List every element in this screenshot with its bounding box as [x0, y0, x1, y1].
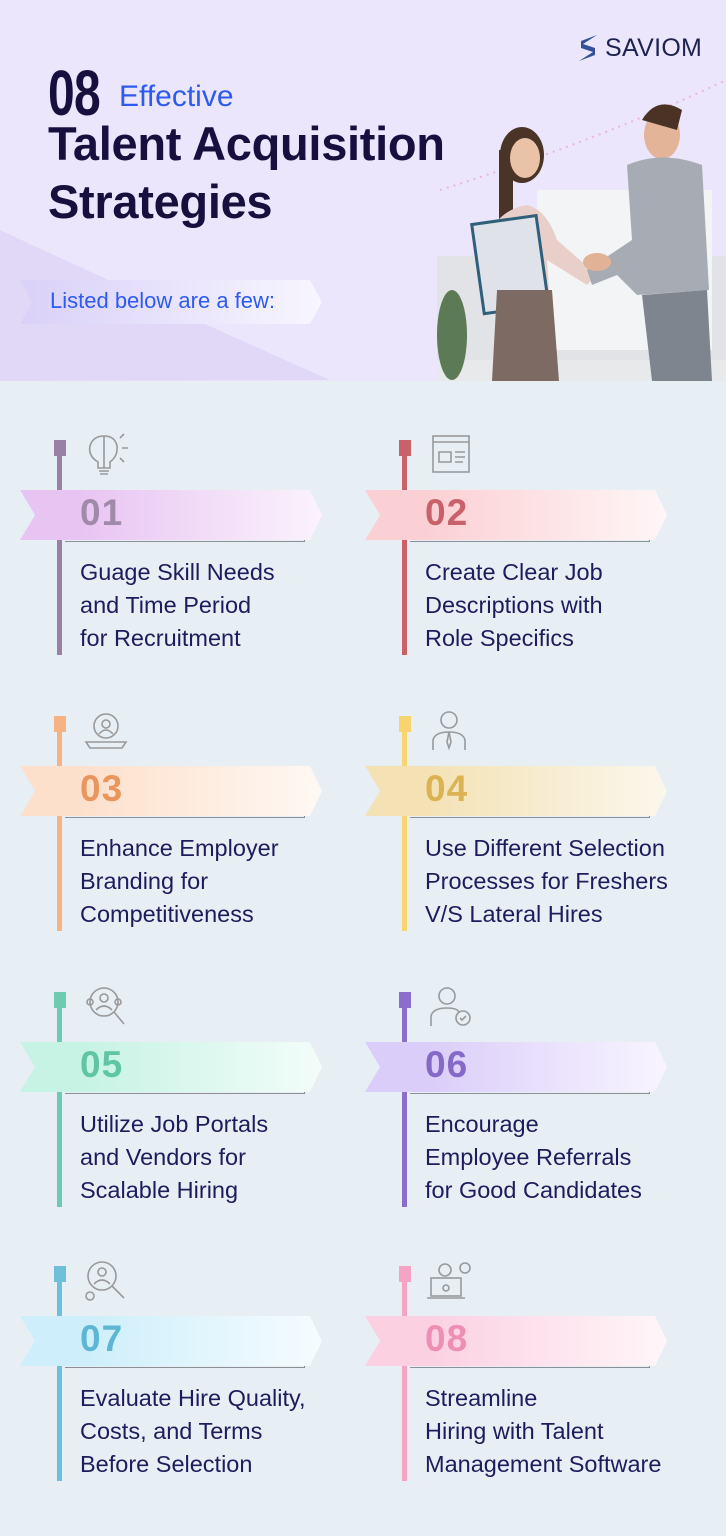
item 05 — [20, 987, 322, 1207]
text 05: Scalable Hiring — [80, 1177, 238, 1203]
number 01: 01 — [80, 492, 123, 533]
icon: laptop with gear — [427, 1262, 471, 1299]
text 05: Utilize Job Portals — [80, 1111, 268, 1137]
title: Effective — [119, 80, 234, 113]
item 02 — [365, 435, 667, 655]
item 03 — [20, 713, 322, 931]
item 07 — [20, 1261, 322, 1481]
text 08 — [425, 1385, 661, 1477]
text 07: Before Selection — [80, 1451, 252, 1477]
text 07 — [80, 1385, 306, 1477]
icon: magnifier person — [85, 1261, 124, 1301]
item 04 — [365, 711, 668, 931]
text 08: Management Software — [425, 1451, 661, 1477]
text 02: Descriptions with — [425, 592, 603, 618]
text 01: for Recruitment — [80, 625, 241, 651]
text 03 — [80, 835, 279, 927]
text 03: Branding for — [80, 868, 208, 894]
text 08: Streamline — [425, 1385, 537, 1411]
logo: SAVIOM: SAVIOM — [605, 34, 702, 62]
icon: person with check — [430, 987, 471, 1026]
number 06: 06 — [425, 1044, 468, 1085]
subtitle ribbon — [52, 280, 322, 324]
number 03: 03 — [80, 768, 123, 809]
number 07: 07 — [80, 1318, 123, 1359]
text 08: Hiring with Talent — [425, 1418, 604, 1444]
text 04: Processes for Freshers — [425, 868, 668, 894]
text 06: Encourage — [425, 1111, 539, 1137]
title — [48, 57, 445, 228]
number 04: 04 — [425, 768, 468, 809]
text 05: and Vendors for — [80, 1144, 246, 1170]
text 03: Enhance Employer — [80, 835, 279, 861]
photo: handshake — [437, 104, 726, 381]
text 02: Create Clear Job — [425, 559, 603, 585]
text 03: Competitiveness — [80, 901, 254, 927]
icon: lightbulb brain — [88, 434, 128, 475]
text 04: V/S Lateral Hires — [425, 901, 603, 927]
icon: award — [84, 713, 128, 749]
number 08: 08 — [425, 1318, 468, 1359]
title: 08 — [48, 57, 100, 129]
item 01 — [20, 434, 322, 655]
item 08 — [365, 1262, 667, 1481]
text 04: Use Different Selection — [425, 835, 665, 861]
item 06 — [365, 987, 667, 1207]
text 05 — [80, 1111, 268, 1203]
text 07: Costs, and Terms — [80, 1418, 262, 1444]
text 02: Role Specifics — [425, 625, 574, 651]
text 01 — [80, 559, 275, 651]
text 07: Evaluate Hire Quality, — [80, 1385, 306, 1411]
number 02: 02 — [425, 492, 468, 533]
header background — [0, 0, 726, 381]
icon: person with tie — [432, 711, 466, 750]
text 06: for Good Candidates — [425, 1177, 642, 1203]
text 06 — [425, 1111, 642, 1203]
subtitle ribbon: Listed below are a few: — [50, 288, 275, 313]
text 01: and Time Period — [80, 592, 251, 618]
text 06: Employee Referrals — [425, 1144, 631, 1170]
text 01: Guage Skill Needs — [80, 559, 275, 585]
title: Talent Acquisition — [48, 117, 445, 170]
text 04 — [425, 835, 668, 927]
icon: search people — [86, 987, 124, 1024]
text 02 — [425, 559, 603, 651]
number 05: 05 — [80, 1044, 123, 1085]
title: Strategies — [48, 175, 272, 228]
icon: job description — [432, 435, 470, 473]
